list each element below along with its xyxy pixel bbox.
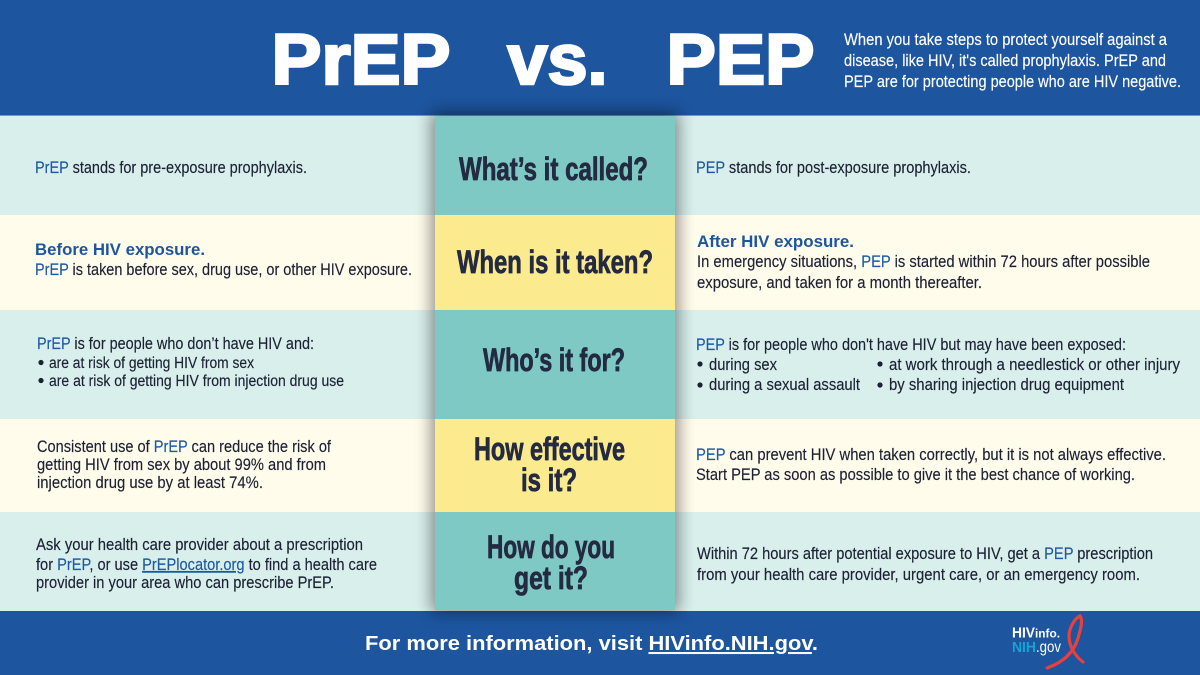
heading: how do you get it: get it? <box>514 560 588 596</box>
header description: When you take steps to protect yourself against a <box>844 30 1168 49</box>
text: who PEP is for: during sex <box>709 355 778 374</box>
footer call to action: For more information, visit HIVinfo.NIH.gov . <box>365 632 818 655</box>
text: how to get PEP: from your health care provider, urgent care, or an emergency room. <box>697 565 1140 584</box>
heading: what's it called <box>435 116 675 215</box>
text: who PEP is for: PEP is for people who don't have HIV but may have been exposed: <box>696 335 1126 354</box>
heading: how do you get it: How do you <box>487 529 615 565</box>
title <box>272 21 814 100</box>
heading: when is it taken: When is it taken? <box>457 244 653 280</box>
text: how to get PEP <box>697 544 1153 584</box>
logo: HIVinfo.NIH.gov with red ribbon <box>1012 616 1083 668</box>
header band <box>0 0 1200 116</box>
text: who PrEP is for: PrEP is for people who don’t have HIV and: <box>37 334 314 353</box>
logo: HIVinfo.NIH.gov with red ribbon: NIH <box>1012 640 1036 656</box>
heading: who's it for: Who’s it for? <box>483 342 625 378</box>
text: who PEP is for <box>696 335 1181 394</box>
text: who PrEP is for: are at risk of getting HIV from sex <box>49 355 254 372</box>
text: PrEP effectiveness <box>37 437 331 492</box>
text: who PrEP is for: are at risk of getting HIV from injection drug use <box>49 373 344 390</box>
title: PrEP <box>272 21 450 100</box>
text: PEP timing: After HIV exposure. <box>697 233 854 251</box>
text: PrEP timing <box>35 241 412 279</box>
panel: center question column <box>435 116 675 610</box>
text: PrEP timing: Before HIV exposure. <box>35 241 205 259</box>
footer band <box>0 611 1200 675</box>
text: who PEP is for: during a sexual assault <box>709 375 860 394</box>
heading: who's it for <box>435 310 675 419</box>
text: PrEP timing: PrEP is taken before sex, drug use, or other HIV exposure. <box>35 260 412 279</box>
logo: HIVinfo.NIH.gov with red ribbon: info. <box>1035 626 1060 640</box>
text: PrEP name: PrEP stands for pre-exposure prophylaxis. <box>35 158 307 177</box>
row backgrounds <box>0 115 1200 611</box>
text: how to get PrEP: Ask your health care provider about a prescription <box>36 535 363 554</box>
text: PrEP effectiveness: Consistent use of PrEP can reduce the risk of <box>37 437 331 456</box>
title: PEP <box>666 21 814 100</box>
text: PrEP effectiveness: getting HIV from sex by about 99% and from <box>37 455 326 474</box>
text: how to get PEP: Within 72 hours after potential exposure to HIV, get a PEP prescription <box>697 544 1153 563</box>
title: vs. <box>508 21 608 100</box>
heading: how effective is it: How effective <box>474 431 625 467</box>
center column shadow <box>431 112 679 612</box>
heading: when is it taken <box>435 215 675 310</box>
text: PEP effectiveness <box>696 445 1166 484</box>
text: PrEP effectiveness: injection drug use by at least 74%. <box>37 473 263 492</box>
heading: what's it called: What’s it called? <box>459 151 648 187</box>
logo: HIVinfo.NIH.gov with red ribbon: .gov <box>1036 639 1061 656</box>
text: how to get PrEP <box>36 535 377 592</box>
header description <box>844 30 1181 91</box>
text: PEP timing: exposure, and taken for a month thereafter. <box>697 273 982 292</box>
text: PEP timing <box>697 233 1150 292</box>
text: PEP timing: In emergency situations, PEP is started within 72 hours after possible <box>697 252 1150 271</box>
text: PEP name: PEP stands for post-exposure prophylaxis. <box>696 158 971 177</box>
logo: HIVinfo.NIH.gov with red ribbon: HIV <box>1012 626 1035 642</box>
heading: how do you get it <box>435 512 675 610</box>
text: how to get PrEP: for PrEP, or use PrEPlocator.org to find a health care <box>36 555 377 574</box>
heading: how effective is it: is it? <box>521 462 577 498</box>
text: PEP effectiveness: Start PEP as soon as possible to give it the best chance of working. <box>696 465 1135 484</box>
text: how to get PrEP: provider in your area who can prescribe PrEP. <box>36 573 334 592</box>
text: who PrEP is for <box>37 334 344 390</box>
text: who PEP is for: by sharing injection drug equipment <box>889 375 1124 394</box>
heading: how effective is it <box>435 419 675 512</box>
